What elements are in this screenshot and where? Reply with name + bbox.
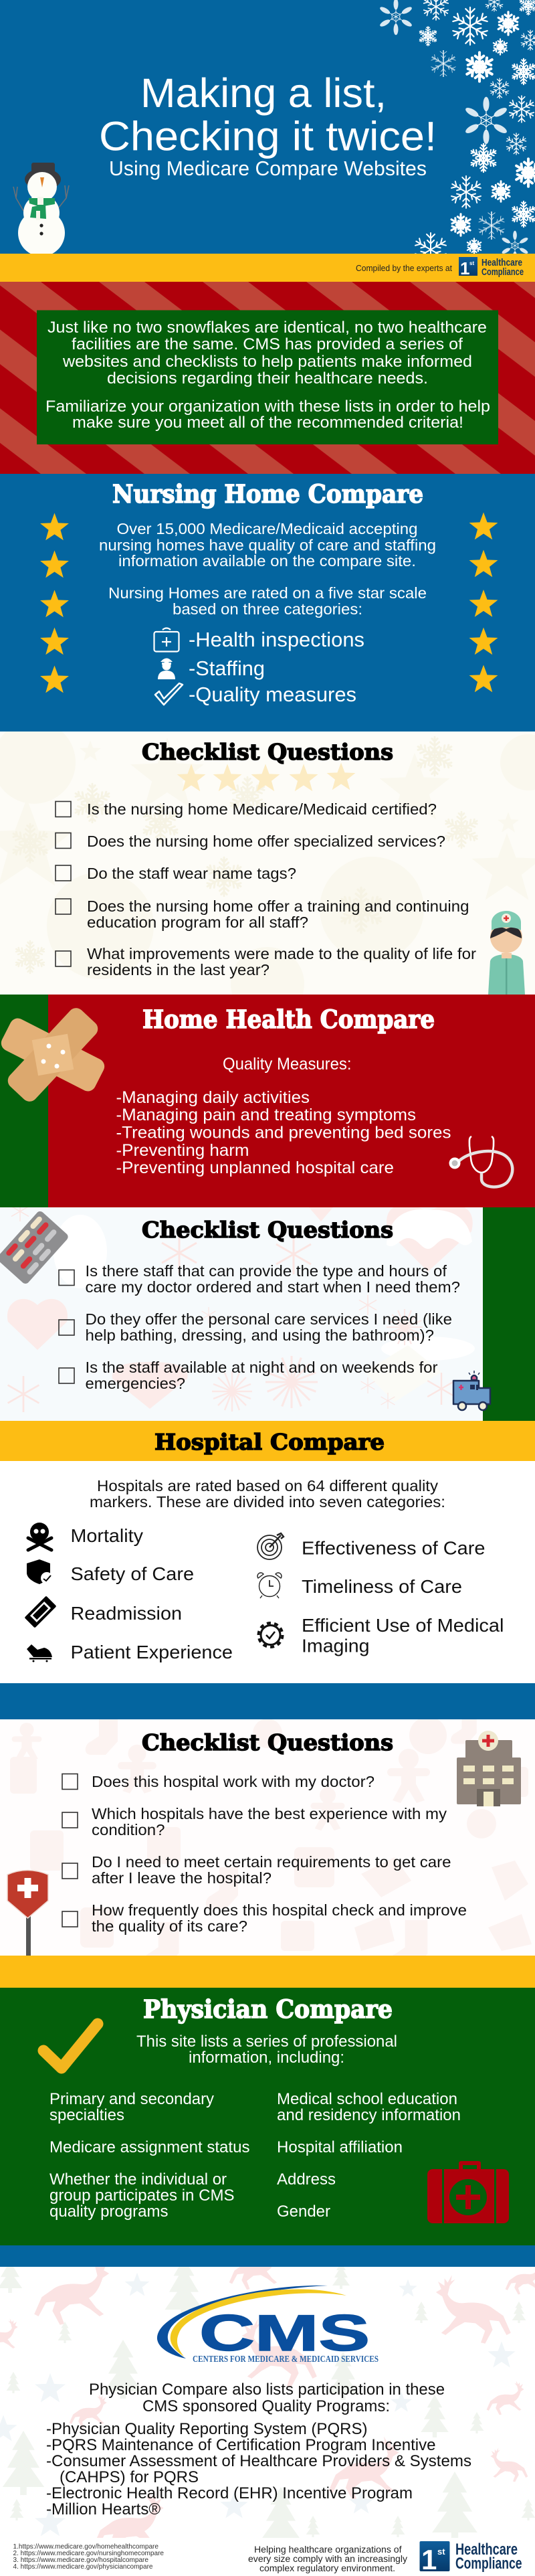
text block: questions: the quality of its care? <box>92 1917 247 1935</box>
text block: questions: education program for all staff? <box>87 914 308 931</box>
icon: stethoscope <box>451 1136 512 1187</box>
list: quality programs: (CAHPS) for PQRS <box>60 2468 199 2486</box>
text block: tagline: every size comply with an increasingly <box>248 2554 407 2564</box>
text block: questions: How frequently does this hospital check and improve <box>92 1901 467 1919</box>
icon: right stars <box>469 512 498 692</box>
panel: Home Health Compare <box>0 995 535 1207</box>
text block: physician intro <box>136 2033 397 2067</box>
yellow divider band <box>0 1956 535 1988</box>
list: quality programs: -Electronic Health Record (EHR) Incentive Program <box>46 2484 413 2502</box>
text block: questions: Does the nursing home offer a training and continuing <box>87 897 469 915</box>
panel: header banner <box>0 0 535 266</box>
icon: nurse <box>488 911 525 995</box>
icon: bandage <box>0 1005 107 1105</box>
title: Checking it twice! <box>99 114 437 159</box>
list: quality programs <box>46 2420 471 2518</box>
text block: programs intro <box>89 2381 445 2415</box>
heading: Home Health Compare <box>142 1005 435 1034</box>
text block: hospital intro: markers. These are divided into seven categories: <box>90 1493 445 1511</box>
icon: staff <box>158 659 175 679</box>
text block: questions: Do I need to meet certain requirements to get care <box>92 1853 451 1871</box>
text block: questions: residents in the last year? <box>87 961 270 978</box>
logo: 1st Healthcare Compliance footer: 1 <box>421 2544 437 2575</box>
list: left information items: quality programs <box>49 2203 169 2221</box>
text block: questions: Is the staff available at night and on weekends for <box>86 1359 438 1376</box>
panel: Hospital checklist <box>7 1719 532 1956</box>
icon: snowman <box>13 163 69 256</box>
logo: CMS: CMS <box>199 2305 370 2362</box>
list: right categories: Timeliness of Care <box>302 1576 462 1597</box>
icon: shield <box>27 1559 53 1584</box>
sidebar <box>0 995 48 1207</box>
list: quality measures <box>116 1088 451 1177</box>
title: Making a list, <box>140 70 387 116</box>
text block: intro paragraph: websites and checklists to help patients make informed <box>62 353 472 371</box>
text block: questions: Do they offer the personal care services I need (like <box>86 1310 452 1328</box>
logo: 1st Healthcare Compliance: Healthcare <box>481 258 522 268</box>
logo: CMS <box>157 2286 379 2365</box>
checkboxes <box>62 1774 78 1927</box>
list: left categories: Mortality <box>71 1525 143 1546</box>
list: left information items: group participates in CMS <box>49 2186 234 2205</box>
icon: pale stars <box>177 762 355 791</box>
logo: 1st Healthcare Compliance footer <box>420 2541 522 2575</box>
list: right information items: Hospital affiliation <box>277 2138 403 2156</box>
text block: questions: Which hospitals have the best experience with my <box>92 1805 447 1822</box>
icon: pill pack <box>0 1210 70 1285</box>
text block: physician intro: This site lists a series of professional <box>136 2033 397 2051</box>
text block: questions: Is there staff that can provide the type and hours of <box>86 1262 447 1280</box>
panel: striped intro <box>0 282 535 474</box>
list: rating categories <box>189 628 364 706</box>
text block: programs intro: Physician Compare also lists participation in these <box>89 2381 445 2399</box>
list: left information items: Whether the individual or <box>49 2170 227 2188</box>
icon: alarm clock <box>257 1573 282 1598</box>
list: quality programs: -PQRS Maintenance of Certification Program Incentive <box>46 2436 436 2454</box>
logo: 1st Healthcare Compliance footer: st <box>437 2547 445 2557</box>
title <box>99 70 437 159</box>
text block: intro paragraph: Familiarize your organization with these lists in order to help <box>45 398 490 416</box>
panel: Nursing Home Compare <box>0 474 535 732</box>
list: quality programs: -Consumer Assessment of Healthcare Providers & Systems <box>46 2452 471 2470</box>
logo: 1st Healthcare Compliance <box>459 257 524 278</box>
sources: 2. https://www.medicare.gov/nursinghomecompare <box>13 2549 164 2557</box>
list: rating categories: -Health inspections <box>189 628 364 651</box>
background: reindeer and trees pattern <box>0 2267 535 2538</box>
checkboxes <box>59 1270 74 1383</box>
icon: yellow check mark <box>43 2024 98 2068</box>
text block: programs intro: CMS sponsored Quality Programs: <box>142 2397 390 2415</box>
list: left information items <box>49 2090 250 2221</box>
text block: tagline <box>248 2545 407 2573</box>
text: quality measures label: Quality Measures: <box>223 1055 352 1074</box>
text block: tagline: Helping healthcare organizations of <box>254 2545 402 2555</box>
list: quality measures: -Treating wounds and preventing bed sores <box>116 1123 451 1142</box>
blue divider band <box>0 1683 535 1719</box>
list: quality measures: -Managing daily activities <box>116 1088 310 1107</box>
list: left information items: Medicare assignment status <box>49 2138 250 2156</box>
text block: questions: condition? <box>92 1821 165 1838</box>
text block: questions <box>86 1262 460 1392</box>
list: right categories: Efficient Use of Medical <box>302 1615 504 1636</box>
icon: gear with check <box>258 1623 282 1647</box>
list: left categories: Readmission <box>71 1603 182 1624</box>
text block: questions: What improvements were made to the quality of life for <box>87 945 476 962</box>
text block: nursing home intro: Over 15,000 Medicare/Medicaid accepting <box>116 520 417 537</box>
text block: nursing home intro: based on three categories: <box>173 600 362 618</box>
blue divider band <box>0 2245 535 2267</box>
logo: 1st Healthcare Compliance: 1 <box>460 258 469 278</box>
text block: tagline: complex regulatory environment. <box>259 2563 395 2573</box>
text block: nursing home intro: Nursing Homes are rated on a five star scale <box>108 584 427 602</box>
list: right categories: Imaging <box>302 1636 369 1656</box>
panel: Nursing Home checklist <box>0 732 535 995</box>
text block: intro paragraph: decisions regarding their healthcare needs. <box>107 369 428 388</box>
icon: red medical bag <box>427 2161 509 2223</box>
panel: Home Health checklist <box>0 1201 535 1421</box>
icon: hospital bed <box>27 1644 52 1662</box>
list: quality measures: -Preventing unplanned hospital care <box>116 1158 394 1177</box>
sources: 3. https://www.medicare.gov/hospitalcompare <box>13 2556 148 2564</box>
text block: questions <box>87 800 476 978</box>
icon: left stars <box>40 513 69 693</box>
text block: hospital intro: Hospitals are rated based on 64 different quality <box>97 1477 439 1494</box>
list: left categories <box>71 1525 233 1662</box>
list: left information items: Primary and secondary <box>49 2090 214 2108</box>
text block: intro paragraph: make sure you meet all of the recommended criteria! <box>72 414 463 432</box>
list: right categories <box>302 1538 504 1656</box>
icon: medical case <box>154 628 179 652</box>
logo: 1st Healthcare Compliance: st <box>469 260 474 266</box>
icon: snowflakes <box>379 0 535 266</box>
background: gingerbread pattern <box>10 1711 532 1970</box>
list: rating categories: -Quality measures <box>189 683 356 706</box>
logo: 1st Healthcare Compliance: Compliance <box>481 267 524 278</box>
heading: Checklist Questions <box>142 739 393 765</box>
text block: questions <box>92 1773 467 1935</box>
panel: compiled by band <box>0 254 535 282</box>
text block: questions: Do the staff wear name tags? <box>87 865 296 882</box>
icon: ticket <box>24 1596 57 1628</box>
text block: questions: Is the nursing home Medicare/Medicaid certified? <box>87 800 437 818</box>
heading: Hospital Compare <box>154 1429 385 1455</box>
text block: intro paragraph: facilities are the same. CMS has provided a series of <box>72 335 463 353</box>
text block: intro paragraph: Just like no two snowflakes are identical, no two healthcare <box>47 319 487 337</box>
list: quality measures: -Managing pain and treating symptoms <box>116 1106 416 1124</box>
text block: questions: Does this hospital work with my doctor? <box>92 1773 374 1790</box>
panel: Hospital Compare <box>0 1421 535 1683</box>
icon: skull <box>28 1523 51 1550</box>
heading: Nursing Home Compare <box>112 479 423 509</box>
text block: nursing home intro <box>99 520 436 618</box>
icon: hospital building <box>457 1731 521 1806</box>
heading: Physician Compare <box>143 1994 393 2024</box>
icon: hospital road sign <box>7 1870 48 1956</box>
list: quality programs: -Million Hearts® <box>46 2500 160 2518</box>
icon: check mark <box>155 683 183 705</box>
text block: questions: Does the nursing home offer specialized services? <box>87 833 445 850</box>
sources: 1.https://www.medicare.gov/homehealthcompare <box>13 2543 158 2551</box>
list: left categories: Patient Experience <box>71 1642 233 1662</box>
list: right information items: Gender <box>277 2203 330 2221</box>
list: right categories: Effectiveness of Care <box>302 1538 486 1558</box>
list: left categories: Safety of Care <box>71 1563 194 1584</box>
list: quality measures: -Preventing harm <box>116 1141 249 1160</box>
list: right information items: and residency information <box>277 2106 461 2124</box>
panel: Physician Compare <box>0 1988 535 2245</box>
checkboxes <box>56 802 71 966</box>
logo: CMS: CENTERS FOR MEDICARE & MEDICAID SERVICES <box>193 2354 379 2365</box>
sources: 4. https://www.medicare.gov/physiciancompare <box>13 2563 153 2571</box>
callout: intro box <box>37 311 498 444</box>
list: right information items <box>277 2090 461 2221</box>
list: rating categories: -Staffing <box>189 657 265 680</box>
text block: questions: after I leave the hospital? <box>92 1869 272 1887</box>
text block: physician intro: information, including: <box>189 2049 344 2067</box>
list: left information items: specialties <box>49 2106 124 2124</box>
sources <box>13 2543 164 2571</box>
text block: questions: care my doctor ordered and start when I need them? <box>86 1278 460 1296</box>
text block: hospital intro <box>90 1477 445 1511</box>
list: right information items: Address <box>277 2170 336 2188</box>
heading: Checklist Questions <box>142 1217 393 1243</box>
list: right information items: Medical school education <box>277 2090 457 2108</box>
subtitle: Using Medicare Compare Websites <box>109 157 427 180</box>
background: hearts pattern <box>7 1201 475 1412</box>
icon: target <box>257 1533 284 1559</box>
text block: questions: emergencies? <box>86 1375 185 1392</box>
text block: questions: help bathing, dressing, and using the bathroom)? <box>86 1326 434 1344</box>
list: quality programs: -Physician Quality Reporting System (PQRS) <box>46 2420 368 2438</box>
text block: nursing home intro: information available on the compare site. <box>118 552 416 570</box>
sidebar <box>483 1207 535 1421</box>
icon: ambulance <box>453 1371 490 1410</box>
background: ornaments pattern <box>0 732 535 995</box>
text block: nursing home intro: nursing homes have quality of care and staffing <box>99 536 436 553</box>
heading: Checklist Questions <box>142 1729 393 1755</box>
panel: CMS programs <box>0 2243 535 2576</box>
attribution text: Compiled by the experts at <box>356 264 452 273</box>
text block: intro paragraph <box>45 319 490 432</box>
